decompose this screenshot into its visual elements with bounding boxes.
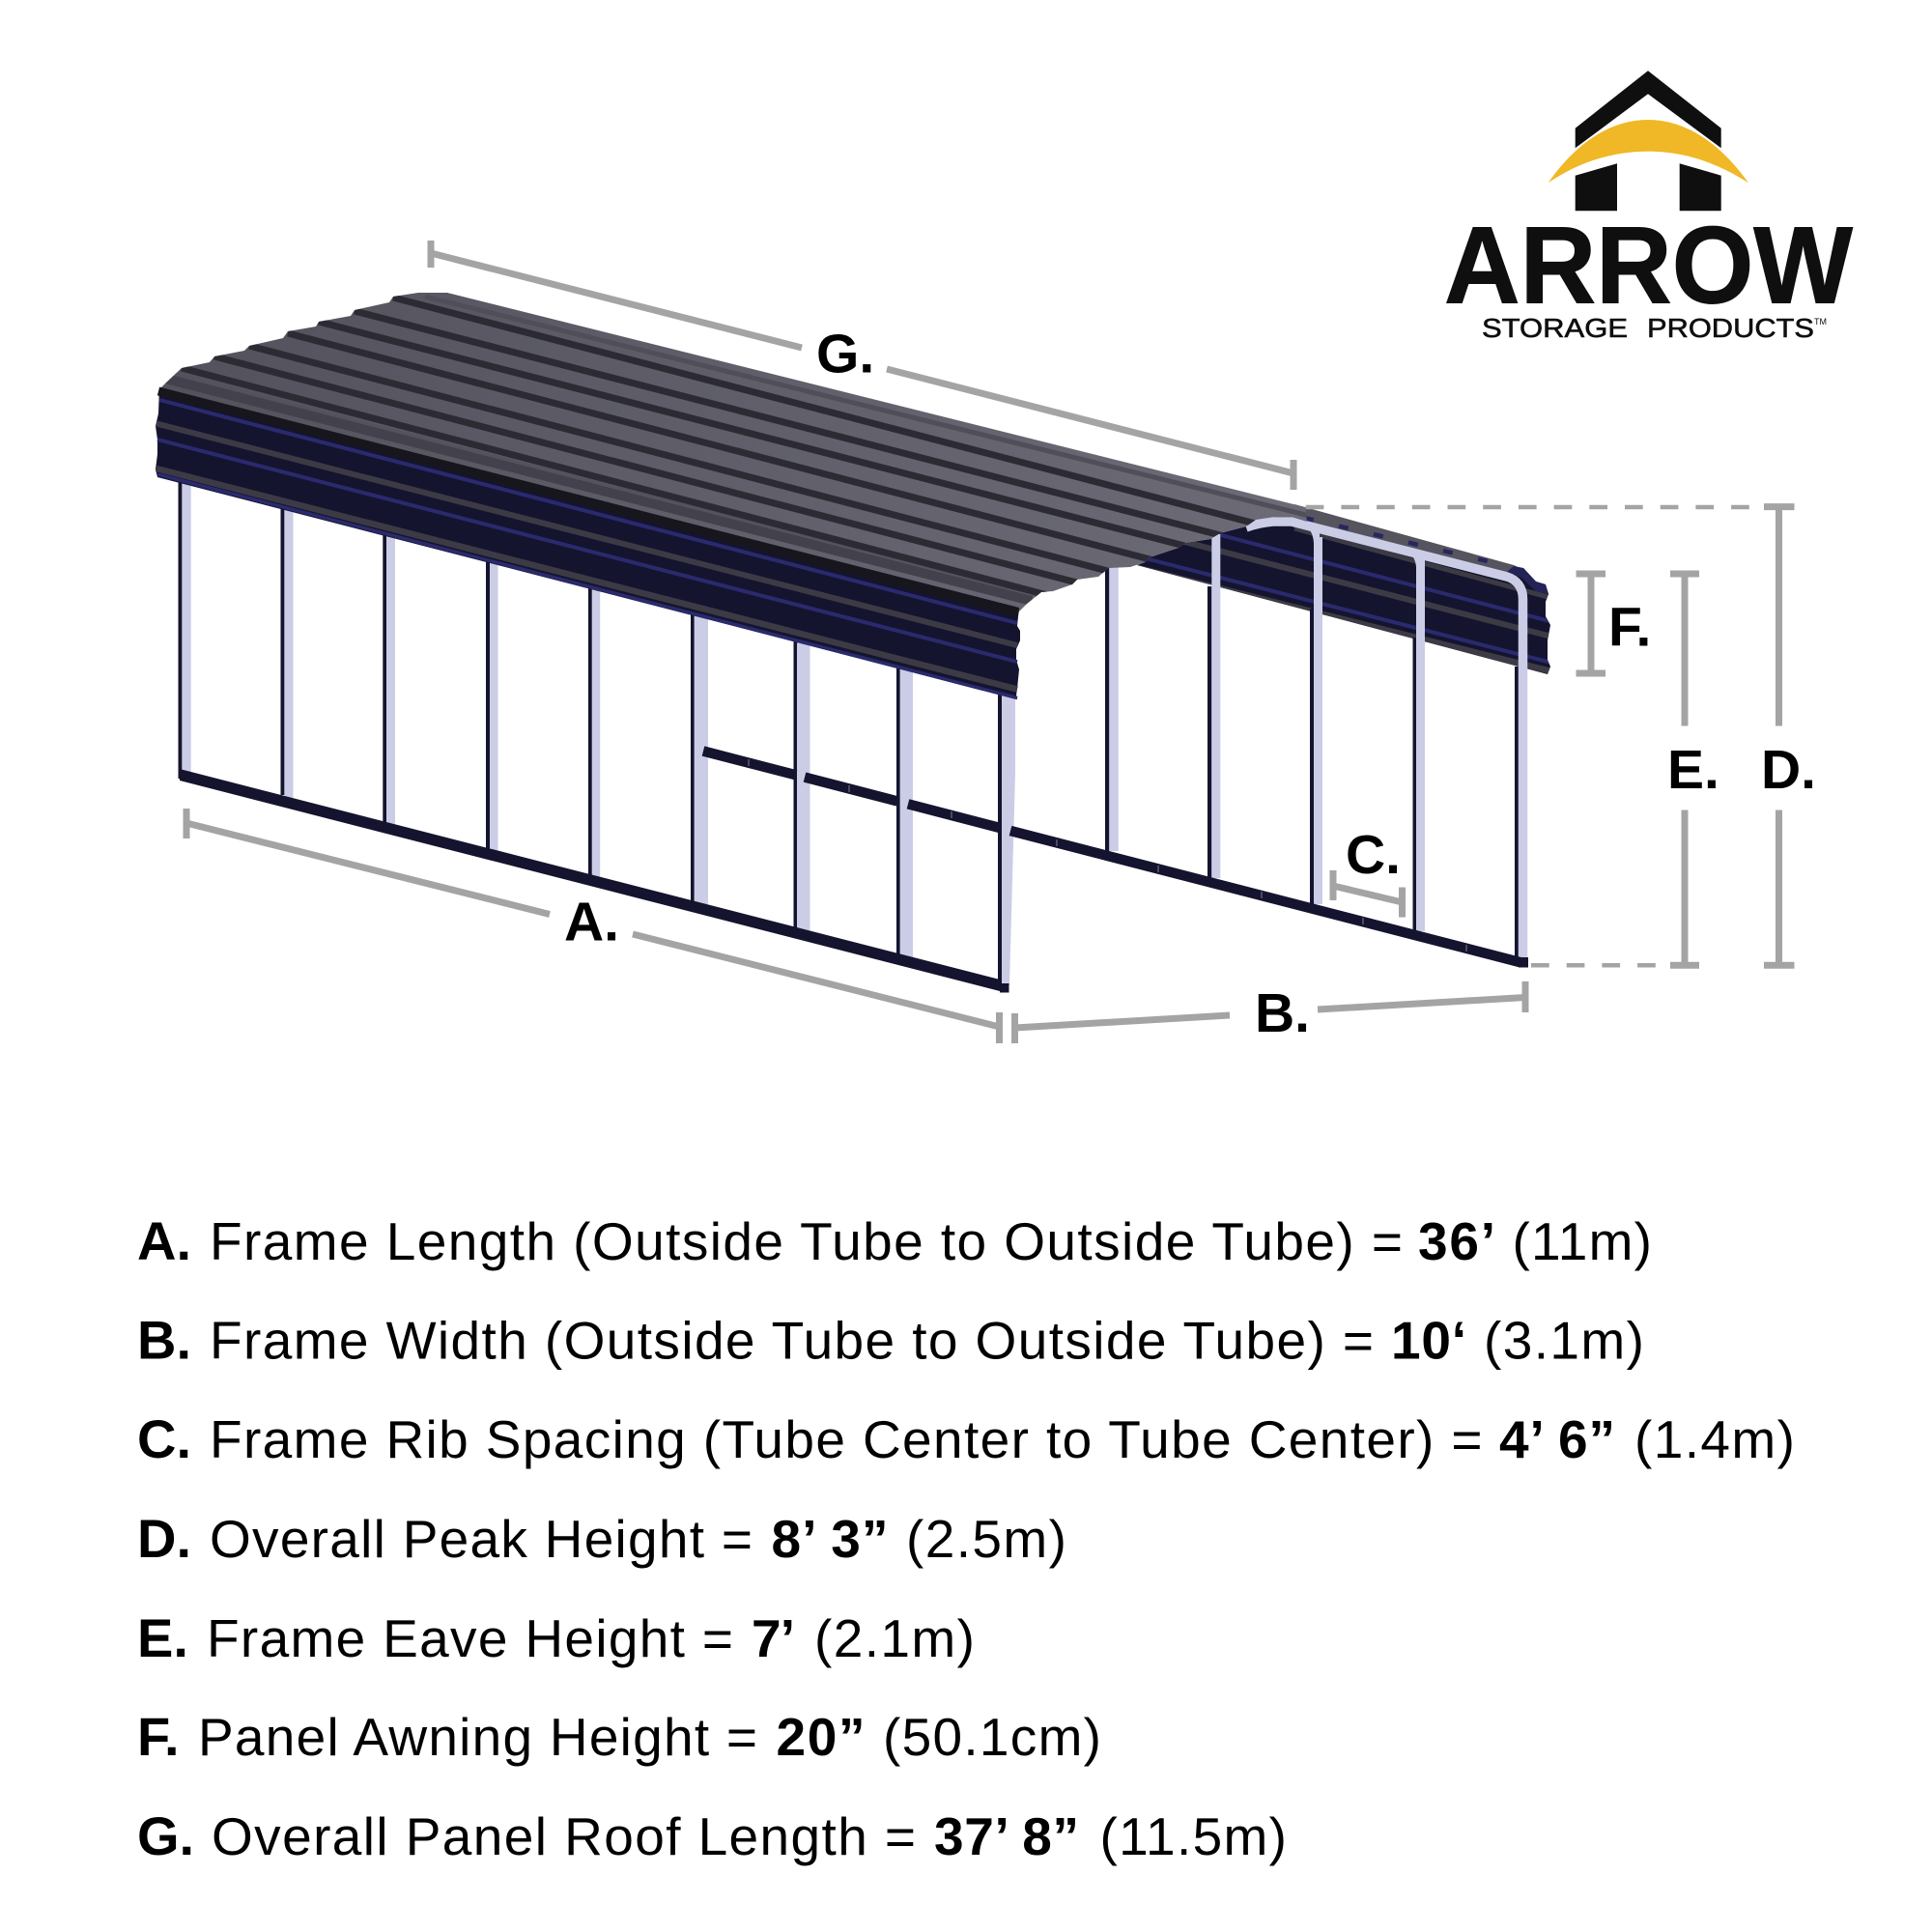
logo: tagline: PRODUCTS bbox=[1647, 313, 1814, 343]
legend line E: Frame Eave Height = bbox=[207, 1608, 733, 1668]
dimension letters bbox=[564, 323, 1816, 1044]
logo: wordmark: ARROW bbox=[1444, 204, 1853, 326]
legend line D: Overall Peak Height = bbox=[210, 1509, 753, 1569]
legend line C: Frame Rib Spacing (Tube Center to Tube Center) = bbox=[210, 1409, 1482, 1469]
legend line F bbox=[137, 1706, 1101, 1767]
legend line C: C. bbox=[137, 1408, 191, 1469]
logo bbox=[1444, 71, 1853, 343]
carport illustration bbox=[156, 293, 1555, 993]
dimension letters: A. bbox=[564, 891, 619, 952]
legend line G: G. bbox=[137, 1805, 194, 1866]
logo: house roof bbox=[1576, 71, 1721, 148]
legend line B: (3.1m) bbox=[1484, 1311, 1644, 1371]
dimension E bbox=[1670, 574, 1699, 965]
logo: trademark: TM bbox=[1814, 317, 1827, 327]
legend line B: Frame Width (Outside Tube to Outside Tube) = bbox=[210, 1311, 1374, 1371]
legend line E bbox=[137, 1607, 975, 1668]
legend line F: Panel Awning Height = bbox=[198, 1707, 757, 1767]
dimension legend bbox=[137, 1210, 1795, 1866]
legend line G: (11.5m) bbox=[1099, 1806, 1287, 1866]
legend line A: (11m) bbox=[1513, 1211, 1652, 1271]
near side posts bbox=[178, 478, 1015, 987]
dimension C bbox=[1333, 870, 1403, 918]
logo: yellow arc bbox=[1548, 120, 1748, 183]
legend line E: E. bbox=[137, 1607, 188, 1668]
legend line G: 37’ 8” bbox=[934, 1806, 1079, 1866]
legend line G: Overall Panel Roof Length = bbox=[212, 1806, 916, 1866]
legend line G bbox=[137, 1805, 1287, 1866]
dashed guide lines bbox=[1306, 507, 1764, 965]
legend line B: B. bbox=[137, 1310, 191, 1371]
legend line E: 7’ bbox=[752, 1608, 795, 1668]
legend line F: (50.1cm) bbox=[883, 1707, 1101, 1767]
dimension letters: C. bbox=[1346, 824, 1401, 886]
legend line A: Frame Length (Outside Tube to Outside Tube) = bbox=[210, 1211, 1403, 1271]
legend line A: 36’ bbox=[1418, 1211, 1495, 1271]
legend line F: 20” bbox=[777, 1707, 866, 1767]
legend line E: (2.1m) bbox=[814, 1608, 975, 1668]
far base rail bbox=[703, 752, 1521, 962]
legend line D: D. bbox=[137, 1508, 191, 1569]
logo: right foot bbox=[1680, 163, 1721, 211]
dimension A bbox=[186, 809, 999, 1043]
logo: tagline bbox=[1482, 313, 1814, 343]
legend line B: 10‘ bbox=[1391, 1311, 1466, 1371]
logo: left foot bbox=[1576, 163, 1617, 211]
far side awning bbox=[1130, 504, 1555, 674]
near base rail bbox=[180, 769, 1009, 993]
far side posts bbox=[1105, 522, 1522, 965]
dimension B bbox=[1014, 981, 1525, 1043]
dimension letters: E. bbox=[1667, 739, 1719, 801]
legend line C: (1.4m) bbox=[1634, 1409, 1795, 1469]
legend line F: F. bbox=[137, 1706, 180, 1767]
legend line A: A. bbox=[137, 1210, 191, 1271]
logo: tagline: STORAGE bbox=[1482, 313, 1628, 343]
dimension G bbox=[431, 241, 1293, 490]
near side awning bbox=[156, 387, 1020, 699]
far roof edge strip bbox=[1294, 504, 1524, 578]
legend line C: 4’ 6” bbox=[1499, 1409, 1615, 1469]
roof panel bbox=[159, 293, 1314, 618]
legend line D: (2.5m) bbox=[906, 1509, 1066, 1569]
dimension letters: F. bbox=[1608, 597, 1651, 659]
legend line D bbox=[137, 1508, 1066, 1569]
rail bolts bbox=[749, 759, 1466, 952]
dimension letters: B. bbox=[1255, 982, 1310, 1044]
dimension lines bbox=[186, 241, 1795, 1043]
dimension D bbox=[1764, 507, 1795, 965]
dimension letters: G. bbox=[816, 323, 874, 384]
dimension F bbox=[1577, 574, 1605, 673]
dimension letters: D. bbox=[1761, 739, 1816, 801]
legend line D: 8’ 3” bbox=[771, 1509, 889, 1569]
